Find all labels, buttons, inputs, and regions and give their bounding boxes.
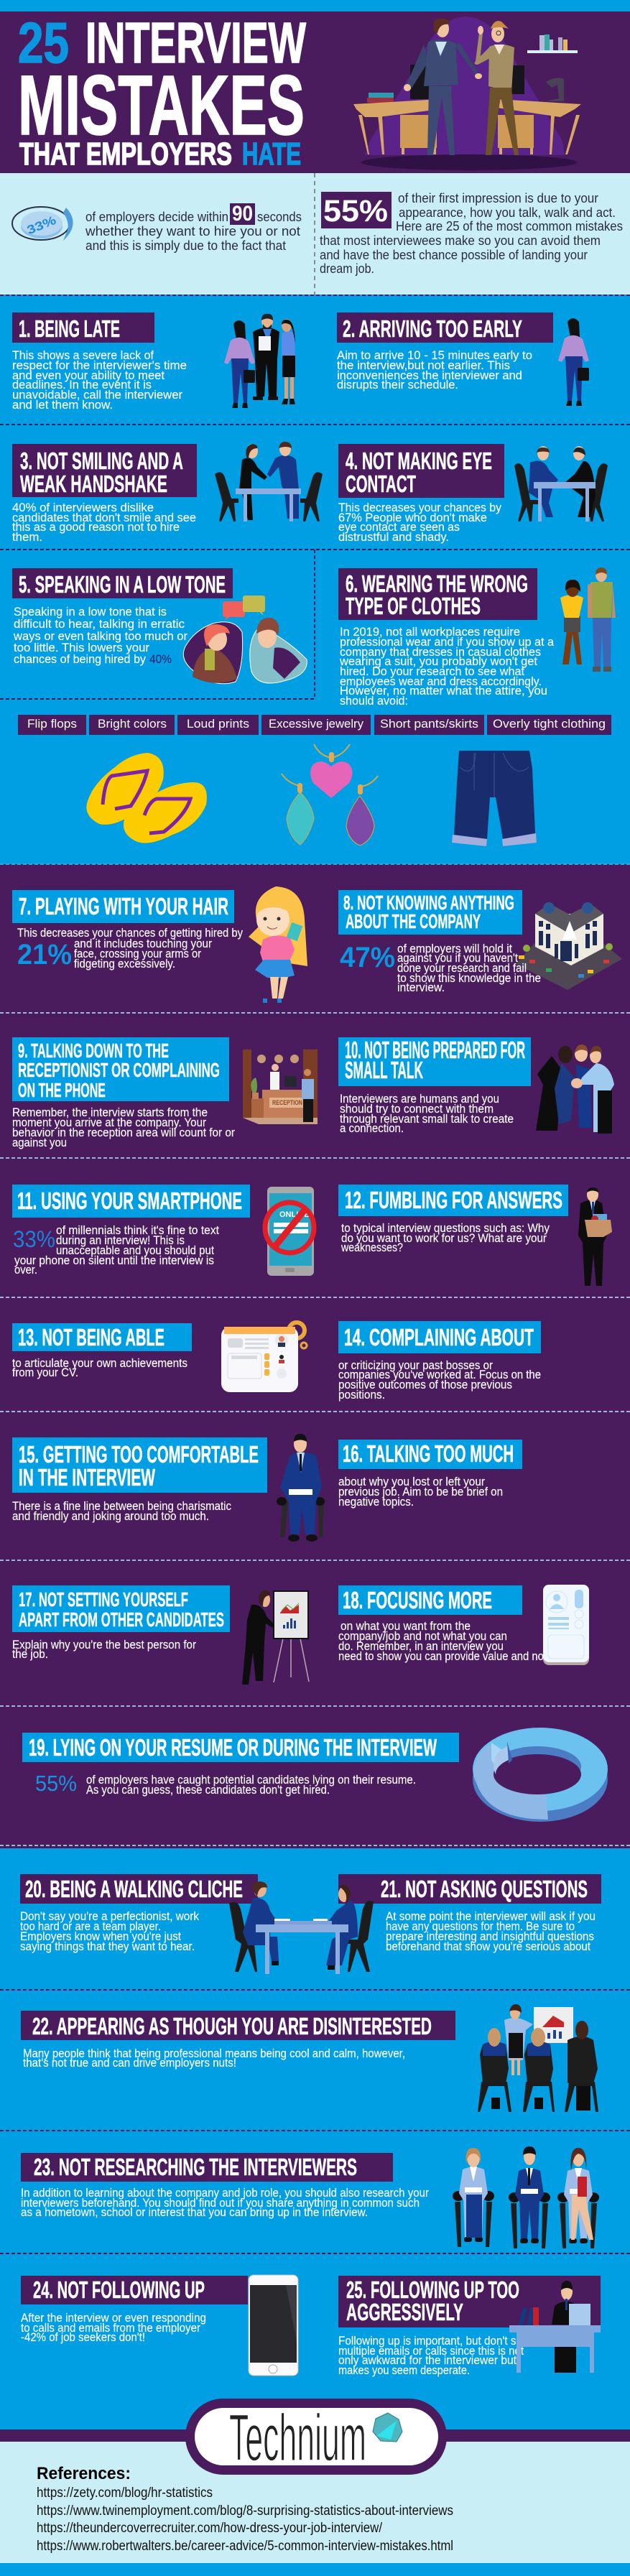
body text 18: on what you want from the xyxy=(341,1619,471,1633)
body text 2: Aim to arrive 10 - 15 minutes early to xyxy=(337,348,532,362)
section background: purple xyxy=(0,864,630,1848)
body text 7: This decreases your chances of getting hired by xyxy=(17,926,243,940)
panel: mistake 3 handshake xyxy=(12,442,323,544)
body text 25 xyxy=(338,2334,534,2377)
body text 14: or criticizing your past bosses or xyxy=(338,1358,493,1372)
icon: three people talking xyxy=(224,314,295,408)
heading 9: 9. TALKING DOWN TO THE xyxy=(18,1039,169,1062)
icon: reception desk xyxy=(243,1050,318,1124)
body text 4: distrustful and shady. xyxy=(338,530,449,544)
body text 1 xyxy=(12,348,187,412)
body text 11: of millennials think it's fine to text xyxy=(56,1223,219,1237)
body text 11: during an interview! This is xyxy=(56,1233,185,1247)
body text 18: company/job and not what you can xyxy=(338,1629,507,1643)
body text 10: a connection. xyxy=(340,1121,404,1135)
text: first impression: that most interviewees make so you can avoid them xyxy=(320,233,601,248)
tag: overly tight clothing xyxy=(487,715,611,735)
body text 5: Speaking in a low tone that is xyxy=(14,605,167,618)
heading 1: 1. BEING LATE xyxy=(19,315,120,342)
icon: three seated interviewers xyxy=(453,2146,599,2248)
tag: overly tight clothing: Overly tight clothing xyxy=(493,717,606,731)
body text 20: Don't say you're a perfectionist, work xyxy=(20,1909,199,1923)
list: clothes to avoid xyxy=(18,715,611,735)
body text 4 xyxy=(338,501,501,544)
panel: mistake 21 not asking questions xyxy=(338,1874,601,1953)
references: https://theundercoverrecruiter.com/how-dress-your-job-interview/ xyxy=(37,2521,383,2536)
title: INTERVIEW xyxy=(85,11,306,75)
body text 25: only awkward for the interviewer but xyxy=(338,2353,516,2367)
body text 7: fidgeting excessively. xyxy=(74,957,175,970)
icon: man at a desk with binders xyxy=(509,2281,601,2373)
body text 7: face, crossing your arms or xyxy=(74,947,201,960)
body text 1: This shows a severe lack of xyxy=(12,348,154,362)
body text 6: hired. Do your research to see what xyxy=(340,664,524,678)
icon: two people talking with speech bubbles xyxy=(183,596,307,684)
icon: presenter at flip chart xyxy=(242,1590,309,1685)
body text 12: weaknesses? xyxy=(341,1241,403,1254)
text: first impression: dream job. xyxy=(320,261,374,276)
references xyxy=(37,2464,453,2554)
heading 20: 20. BEING A WALKING CLICHE xyxy=(25,1876,243,1902)
tag: flip flops: Flip flops xyxy=(27,717,77,731)
heading 11 xyxy=(12,1185,250,1218)
body text 11 xyxy=(13,1223,219,1277)
icon: 33% disc xyxy=(12,207,73,241)
heading 18: 18. FOCUSING MORE xyxy=(343,1587,492,1613)
body text 15 xyxy=(12,1499,231,1523)
body text 12 xyxy=(341,1221,550,1254)
references: https://www.twinemployment.com/blog/8-surprising-statistics-about-interviews xyxy=(37,2503,453,2519)
body text 16 xyxy=(338,1475,503,1509)
tag: short pants/skirts xyxy=(374,715,484,735)
tag: loud prints: Loud prints xyxy=(187,717,249,731)
references: https://zety.com/blog/hr-statistics xyxy=(37,2485,213,2501)
body text 6: should avoid: xyxy=(340,694,408,708)
panel: mistake 9 talking down to receptionist xyxy=(12,1037,318,1149)
heading 16: 16. TALKING TOO MUCH xyxy=(343,1440,514,1467)
heading 24 xyxy=(21,2276,248,2304)
body text 3: candidates that don't smile and see xyxy=(12,511,196,524)
body text 21: beforehand that show you're serious about xyxy=(386,1940,590,1953)
body text 6: professional wear and if you show up at a xyxy=(340,635,555,649)
section background: blue lower xyxy=(0,1848,630,2429)
body text 17: the job. xyxy=(12,1647,48,1661)
body text 18: do. Remember, in an interview you xyxy=(338,1639,504,1653)
body text 19: of employers have caught potential candidates lying on their resume. xyxy=(86,1773,416,1787)
icon: woman with bag xyxy=(558,318,589,406)
references: References: xyxy=(37,2464,131,2483)
panel: references background xyxy=(0,2442,630,2563)
heading 4 xyxy=(338,444,504,498)
text: first impression: and have the best chance possible of landing your xyxy=(320,248,588,262)
tag: flip flops xyxy=(18,715,86,735)
title xyxy=(18,11,306,172)
icon: office building xyxy=(516,902,622,990)
heading 19 xyxy=(22,1733,459,1762)
heading 11: 11. USING YOUR SMARTPHONE xyxy=(17,1187,242,1214)
icon: denim shorts xyxy=(452,751,537,846)
body text 22 xyxy=(23,2047,405,2070)
body text 2 xyxy=(337,348,532,392)
body text 13: from your CV. xyxy=(12,1366,78,1379)
body text 23 xyxy=(21,2186,429,2219)
body text 11: over. xyxy=(14,1263,37,1277)
body text 19: As you can guess, these candidates don't get hired. xyxy=(86,1783,330,1797)
body text 23: In addition to learning about the company and job role, you should also research your xyxy=(21,2186,429,2200)
icon: gemstone jewelry xyxy=(282,744,378,845)
body text 9 xyxy=(12,1106,235,1149)
body text 13: to articulate your own achievements xyxy=(12,1356,187,1370)
tag: excessive jewelry: Excessive jewelry xyxy=(269,717,363,731)
body text 17: Explain why you're the best person for xyxy=(12,1638,196,1651)
body text 6: employees wear and dress accordingly. xyxy=(340,675,542,688)
icon: audience watching a presentation xyxy=(478,2004,598,2112)
body text 1: deadlines. In the event it is xyxy=(12,378,152,392)
heading 25: AGGRESSIVELY xyxy=(346,2299,463,2325)
body text 5: 40% xyxy=(149,652,172,666)
body text 21: prepare interesting and insightful questions xyxy=(386,1929,594,1943)
heading 10 xyxy=(338,1037,531,1086)
heading 14 xyxy=(338,1321,541,1353)
body text 22: Many people think that being professional means being cool and calm, however, xyxy=(23,2047,405,2060)
body text 8: interview. xyxy=(397,981,445,994)
panel: mistake 10 small talk xyxy=(338,1037,614,1135)
heading 15 xyxy=(12,1437,267,1493)
body text 14: companies you've worked at. Focus on the xyxy=(338,1368,541,1381)
body text 6: However, no matter what the attire, you xyxy=(340,684,547,698)
heading 16 xyxy=(338,1440,522,1469)
body text 24: -42% of job seekers don't! xyxy=(21,2330,145,2344)
panel: mistake 19 lying on your resume xyxy=(22,1728,608,1822)
body text 10: through relevant small talk to create xyxy=(340,1112,514,1126)
header panel xyxy=(0,11,630,173)
body text 1: and even your ability to meet xyxy=(12,369,165,382)
body text 12: to typical interview questions such as: Why xyxy=(341,1221,550,1235)
body text 1: and let them know. xyxy=(12,398,113,412)
heading 4: CONTACT xyxy=(346,471,416,497)
icon: 33% disc: 33% xyxy=(25,213,58,237)
body text 16: about why you lost or left your xyxy=(338,1475,485,1488)
body text 3 xyxy=(12,501,196,544)
title: 25 xyxy=(18,11,69,75)
body text 8: done your research and fail xyxy=(397,961,527,975)
text: 90 seconds statistic: whether they want to hire you or not xyxy=(85,224,300,238)
body text 20: Employers know when you're just xyxy=(20,1929,181,1943)
panel: mistake 13 not being able xyxy=(12,1322,307,1392)
body text 7 xyxy=(17,926,243,970)
body text 5 xyxy=(13,605,187,666)
heading 15: IN THE INTERVIEW xyxy=(19,1464,156,1491)
body text 3: this as a good reason not to hire xyxy=(12,520,180,534)
logo: Technium pill xyxy=(185,2399,447,2475)
title: THAT EMPLOYERS xyxy=(19,136,232,172)
body text 1: unavoidable, call the interviewer xyxy=(12,388,182,402)
panel: mistake 22 disinterested xyxy=(21,2004,598,2112)
body text 8: against you if you haven't xyxy=(397,951,518,965)
heading 9 xyxy=(12,1037,229,1101)
text: 90 seconds statistic: and this is simply due to the fact that xyxy=(85,238,286,253)
heading 7 xyxy=(12,890,234,923)
heading 6: TYPE OF CLOTHES xyxy=(346,593,481,619)
body text 6: company that dresses in casual clothes xyxy=(340,645,541,659)
icon: two people at a table xyxy=(514,446,608,522)
panel: mistake 4 eye contact xyxy=(338,444,608,544)
icon: handshake at a table xyxy=(215,442,323,522)
body text 10 xyxy=(340,1092,514,1135)
icon: crossed-out smartphone xyxy=(265,1187,314,1276)
heading 10: SMALL TALK xyxy=(345,1057,423,1083)
logo: Technium pill: Technium xyxy=(229,2401,366,2475)
panel: mistake 2 arriving too early xyxy=(337,312,589,406)
panel: mistake 1 being late xyxy=(12,312,295,412)
heading 8: ABOUT THE COMPANY xyxy=(346,910,481,932)
heading 13 xyxy=(12,1323,192,1351)
references: https://www.robertwalters.be/career-advice/5-common-interview-mistakes.html xyxy=(37,2539,453,2554)
icon: white smartphone xyxy=(249,2275,298,2376)
body text 20: too hard or are a team player. xyxy=(20,1919,161,1933)
body text 11: unacceptable and you should put xyxy=(56,1243,214,1257)
body text 9: moment you arrive at the company. Your xyxy=(12,1116,206,1129)
heading 6 xyxy=(338,568,537,620)
heading 20 xyxy=(20,1874,258,1904)
body text 22: that's not true and can drive employers nuts! xyxy=(23,2056,236,2070)
body text 8 xyxy=(340,942,541,994)
body text 23: as a hometown, school or interest that you can bring up in the interview. xyxy=(21,2205,368,2219)
body text 1: respect for the interviewer's time xyxy=(12,358,187,372)
body text 18 xyxy=(338,1619,547,1663)
body text 8: to show this knowledge in the xyxy=(397,971,541,985)
body text 25: multiple emails or calls since this is not xyxy=(338,2344,524,2358)
body text 3: them. xyxy=(12,530,42,544)
body text 9: behavior in the reception area will count for or xyxy=(12,1126,235,1139)
body text 7: 21% xyxy=(17,939,72,970)
body text 14: positions. xyxy=(338,1388,385,1401)
body text 15: There is a fine line between being charismatic xyxy=(12,1499,231,1513)
text: 90 seconds statistic: seconds xyxy=(257,210,302,224)
text: 90 seconds statistic: of employers decide within xyxy=(85,210,228,224)
heading 17: APART FROM OTHER CANDIDATES xyxy=(19,1608,224,1631)
panel: mistake 14 complaining about xyxy=(338,1321,541,1401)
panel: mistake 18 focusing more xyxy=(338,1585,589,1665)
panel: mistake 25 following up aggressively xyxy=(338,2276,601,2377)
icon: casually dressed couple xyxy=(560,567,616,672)
tag: bright colors: Bright colors xyxy=(98,717,167,731)
heading 2: 2. ARRIVING TOO EARLY xyxy=(343,315,522,342)
text: first impression: of their first impression is due to your xyxy=(398,191,598,205)
panel: mistake 11 using smartphone xyxy=(12,1185,314,1277)
body text 13 xyxy=(12,1356,187,1379)
body text 6 xyxy=(339,625,555,708)
body text 2: inconveniences the interviewer and xyxy=(337,369,522,382)
body text 21: have any questions for them. Be sure to xyxy=(386,1919,575,1933)
icon: flip flops xyxy=(86,753,207,843)
heading 7: 7. PLAYING WITH YOUR HAIR xyxy=(19,893,228,919)
heading 13: 13. NOT BEING ABLE xyxy=(18,1324,165,1350)
body text 6: In 2019, not all workplaces require xyxy=(340,625,520,639)
heading 8: 8. NOT KNOWING ANYTHING xyxy=(343,891,514,914)
panel: mistake 6 wrong clothes xyxy=(338,567,616,708)
title: MISTAKES xyxy=(18,58,305,153)
heading 23 xyxy=(21,2153,393,2182)
body text 9: Remember, the interview starts from the xyxy=(12,1106,208,1119)
panel: mistake 7 playing with hair xyxy=(12,886,307,1003)
panel: mistake 17 not setting yourself apart xyxy=(12,1585,309,1685)
body text 14 xyxy=(338,1358,541,1401)
body text 16: negative topics. xyxy=(338,1495,414,1509)
tag: loud prints xyxy=(177,715,259,735)
band: purple divider xyxy=(0,2429,630,2442)
heading 9: ON THE PHONE xyxy=(18,1079,106,1101)
body text 17 xyxy=(12,1638,196,1661)
heading 22 xyxy=(21,2011,455,2040)
body text 24 xyxy=(21,2311,206,2344)
heading 3 xyxy=(12,444,197,497)
body text 5: too little. This lowers your xyxy=(14,641,149,654)
panel: mistake 20 walking cliche xyxy=(20,1874,258,1953)
body text 6: wearing a suit, you probably won't get xyxy=(339,654,537,668)
body text 15: and friendly and joking around too much. xyxy=(12,1509,209,1523)
body text 4: 67% People who don't make xyxy=(338,511,487,524)
heading 4: 4. NOT MAKING EYE xyxy=(346,448,492,474)
heading 12 xyxy=(338,1185,568,1216)
body text 25: Following up is important, but don't send xyxy=(338,2334,534,2348)
panel: mistake 24 not following up xyxy=(21,2275,298,2376)
body text 24: After the interview or even responding xyxy=(21,2311,206,2325)
icon: crossed-out smartphone: ONLINE xyxy=(279,1210,310,1219)
panel: mistake 8 knowing nothing about company xyxy=(338,890,622,994)
body text 23: interviewers beforehand. You should find out if you share anything in common such xyxy=(21,2196,420,2210)
title: HATE xyxy=(242,136,301,172)
body text 20 xyxy=(20,1909,199,1953)
illustration: two men arguing in an office xyxy=(353,17,581,170)
text: first impression: appearance, how you talk, walk and act. xyxy=(399,205,616,220)
body text 7: and it includes touching your xyxy=(74,937,212,950)
tag: bright colors xyxy=(89,715,175,735)
body text 4: eye contact are seen as xyxy=(338,520,460,534)
icon: profile card xyxy=(543,1585,589,1665)
heading 3: WEAK HANDSHAKE xyxy=(20,471,167,497)
heading 3: 3. NOT SMILING AND A xyxy=(20,448,183,474)
body text 8: of employers will hold it xyxy=(397,942,512,955)
body text 19 xyxy=(35,1771,416,1797)
body text 25: makes you seem desperate. xyxy=(338,2363,470,2377)
icon: CV card with gears xyxy=(221,1322,307,1392)
body text 5: difficult to hear, talking in erratic xyxy=(14,617,185,631)
heading 24: 24. NOT FOLLOWING UP xyxy=(33,2276,205,2303)
body text 9: against you xyxy=(12,1136,67,1149)
body text 8: 47% xyxy=(340,942,395,973)
icon: interview across a table xyxy=(229,1881,374,1974)
body text 19: 55% xyxy=(35,1771,77,1796)
panel: mistake 15 too comfortable xyxy=(12,1434,325,1542)
body text 5: chances of being hired by xyxy=(14,652,146,666)
heading 25: 25. FOLLOWING UP TOO xyxy=(346,2276,519,2303)
body text 3: 40% of interviewers dislike xyxy=(12,501,154,514)
heading 17 xyxy=(12,1585,230,1632)
body text 10: Interviewers are humans and you xyxy=(340,1092,499,1106)
body text 11: your phone on silent until the interview is xyxy=(14,1254,214,1267)
heading 15: 15. GETTING TOO COMFORTABLE xyxy=(19,1441,259,1468)
heading 23: 23. NOT RESEARCHING THE INTERVIEWERS xyxy=(34,2154,357,2180)
body text 5: ways or even talking too much or xyxy=(13,629,187,643)
heading 21 xyxy=(338,1874,601,1904)
heading 17: 17. NOT SETTING YOURSELF xyxy=(19,1588,188,1611)
body text 21 xyxy=(386,1909,596,1953)
panel: mistake 23 researching interviewers xyxy=(21,2146,599,2248)
icon: man carrying a box xyxy=(578,1187,612,1286)
heading 8 xyxy=(338,890,522,935)
tag: short pants/skirts: Short pants/skirts xyxy=(380,717,478,731)
body text 11: 33% xyxy=(13,1226,55,1252)
icon: seated man in suit xyxy=(277,1434,325,1542)
panel: mistake 16 talking too much xyxy=(338,1440,522,1509)
callout: 55% box: 55% xyxy=(323,194,388,228)
heading 5: 5. SPEAKING IN A LOW TONE xyxy=(19,571,226,598)
body text 20: saying things that they want to hear. xyxy=(20,1940,195,1953)
icon: girl playing with her hair xyxy=(249,886,307,1003)
body text 10: should try to connect with them xyxy=(340,1102,494,1116)
text: 90 seconds statistic: 90 xyxy=(232,202,253,226)
heading 9: RECEPTIONIST OR COMPLAINING xyxy=(18,1059,220,1081)
icon: reception desk: RECEPTION xyxy=(272,1099,302,1106)
tag: excessive jewelry xyxy=(261,715,371,735)
body text 21: At some point the interviewer will ask if you xyxy=(386,1909,596,1923)
body text 14: positive outcomes of those previous xyxy=(338,1378,512,1391)
heading 25 xyxy=(338,2276,601,2327)
icon: 3D donut chart xyxy=(473,1728,608,1822)
body text 16: previous job. Aim to be be brief on xyxy=(338,1485,503,1498)
body text 12: do you want to work for us? What are your xyxy=(341,1231,547,1245)
body text 4: This decreases your chances by xyxy=(338,501,501,514)
body text 2: disrupts their schedule. xyxy=(337,378,458,392)
panel: mistake 12 fumbling for answers xyxy=(338,1185,612,1286)
panel: intro statistics xyxy=(0,173,630,295)
body text 18: need to show you can provide value and not xyxy=(338,1649,547,1663)
body text 2: the interview,but not earlier. This xyxy=(337,358,510,372)
heading 5 xyxy=(12,568,233,598)
text: 90 seconds statistic xyxy=(85,202,302,253)
icon: team huddle xyxy=(536,1044,614,1134)
panel: mistake 5 low tone xyxy=(12,568,307,684)
body text 24: to calls and emails from the employer xyxy=(21,2321,200,2335)
heading 2 xyxy=(337,312,553,343)
text: first impression xyxy=(320,191,623,276)
heading 18 xyxy=(338,1585,522,1615)
